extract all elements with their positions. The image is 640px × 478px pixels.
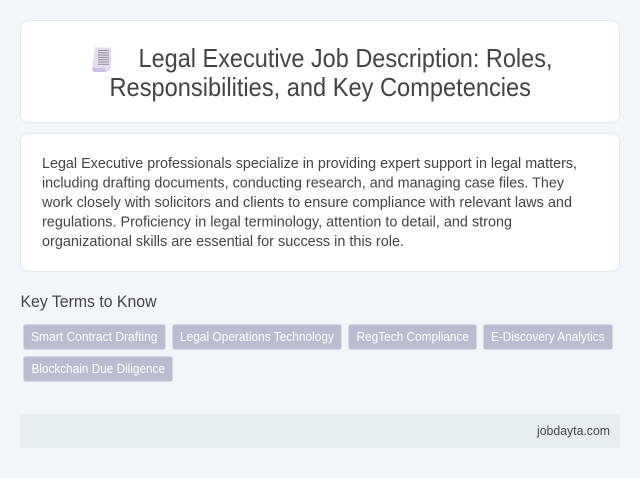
icon: legal scroll document [92, 47, 111, 72]
text block: description: including drafting documents, conducting research, and managing case files. They [42, 174, 564, 192]
tag: legal operations technology: Legal Operations Technology [180, 330, 335, 344]
tag: e-discovery analytics [484, 324, 612, 350]
footer [20, 414, 620, 448]
text block: description: work closely with solicitors and clients to ensure compliance with relevant laws and [41, 194, 572, 211]
tag: blockchain due diligence: Blockchain Due Diligence [32, 362, 165, 376]
tag: blockchain due diligence [24, 356, 172, 382]
panel: title card [20, 20, 620, 122]
text block: description: regulations. Proficiency in legal terminology, attention to detail, and strong [42, 214, 512, 230]
tag: e-discovery analytics: E-Discovery Analytics [491, 330, 604, 344]
tag: legal operations technology [172, 324, 342, 350]
tag: regtech compliance [348, 324, 476, 350]
title: Legal Executive Job Description: Roles, [138, 45, 552, 73]
tag: regtech compliance: RegTech Compliance [356, 330, 469, 344]
title: Responsibilities, and Key Competencies [110, 74, 531, 102]
panel: description card [20, 134, 620, 272]
footer: jobdayta.com [536, 424, 610, 438]
tag: smart contract drafting [24, 324, 166, 350]
text block: description: organizational skills are essential for success in this role. [42, 233, 404, 250]
text block: description [41, 155, 577, 250]
text block: description: Legal Executive professionals specialize in providing expert support in legal matters, [42, 155, 577, 172]
heading: key terms: Key Terms to Know [20, 293, 157, 311]
title [110, 45, 552, 102]
tag: smart contract drafting: Smart Contract Drafting [31, 330, 158, 344]
